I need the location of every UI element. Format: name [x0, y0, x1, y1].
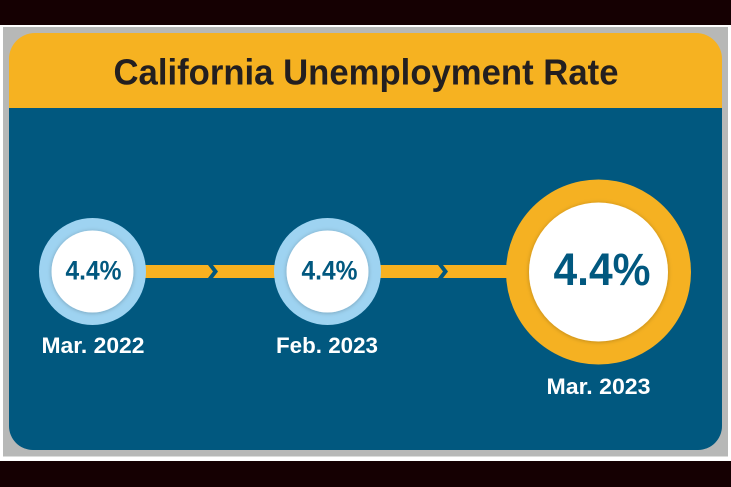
panel: blue body — [9, 100, 722, 450]
title: California Unemployment Rate — [114, 52, 618, 92]
value: Mar. 2023: 4.4% — [554, 244, 650, 295]
label: Feb. 2023: Feb. 2023 — [276, 333, 378, 358]
connector arrow: first — [140, 265, 280, 278]
value: Feb. 2023: 4.4% — [302, 256, 358, 286]
panel: yellow header — [9, 33, 722, 108]
circle: Feb. 2023 — [274, 218, 381, 325]
label: Mar. 2022: Mar. 2022 — [42, 333, 144, 358]
circle: Mar. 2022 — [39, 218, 146, 325]
connector arrow: second — [375, 265, 515, 278]
value: Mar. 2022: 4.4% — [66, 256, 122, 286]
label: Mar. 2023: Mar. 2023 — [546, 374, 650, 399]
circle: Mar. 2023 — [506, 180, 691, 364]
